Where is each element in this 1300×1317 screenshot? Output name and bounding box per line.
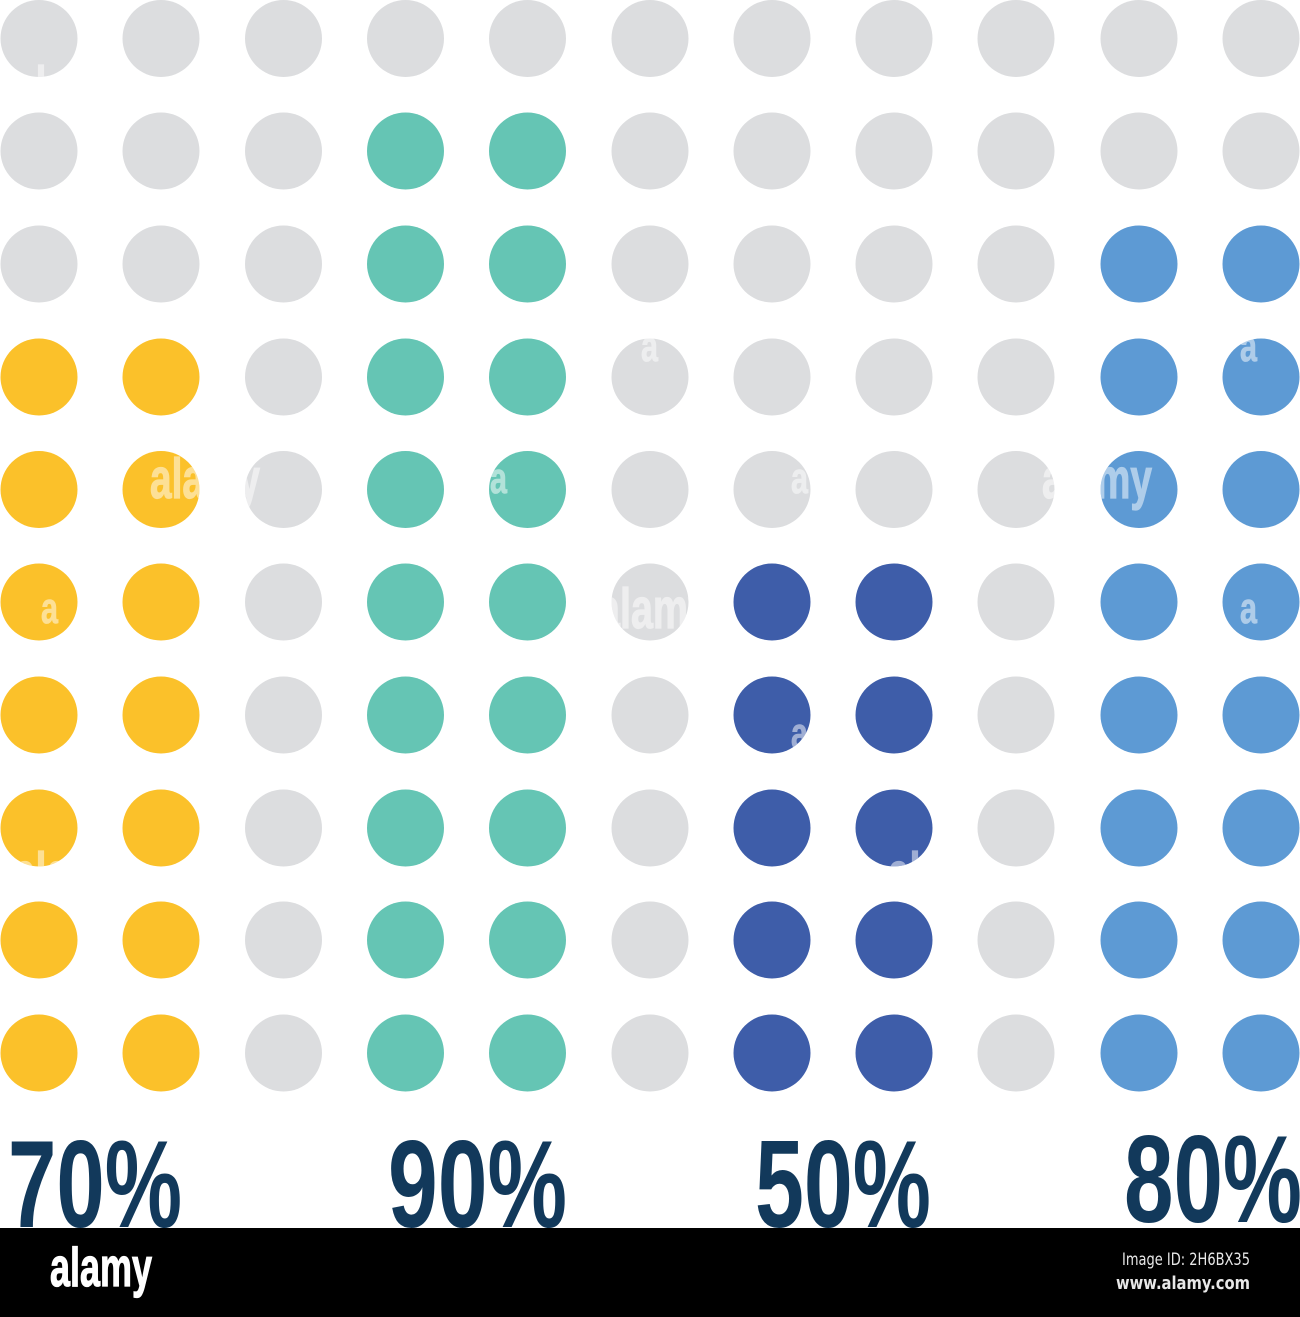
watermark fragments on dots: alamy: [1042, 447, 1152, 511]
label: 50%: 50%: [755, 1116, 931, 1254]
watermark fragments on dots: a: [490, 454, 507, 503]
watermark fragments on dots: a: [791, 454, 808, 503]
spacer column of grey dots, right: [978, 0, 1054, 1092]
watermark fragments on dots: [14, 55, 1257, 905]
watermark fragments on dots: alamy: [888, 841, 998, 905]
watermark fragments on dots: a: [641, 322, 658, 371]
chart: 50% navy dot column: [734, 0, 932, 1092]
footer bar: [0, 1228, 1300, 1317]
watermark fragments on dots: alamy: [14, 55, 124, 119]
watermark fragments on dots: alamy: [150, 447, 260, 511]
spacer column of grey dots: [245, 0, 322, 1092]
spacer column of grey dots, middle: [612, 0, 688, 1092]
chart: 80% blue dot column: [1100, 0, 1300, 1092]
chart: 90% teal dot column: [367, 0, 566, 1092]
watermark fragments on dots: a: [1240, 584, 1257, 633]
watermark fragments on dots: alamy: [1042, 447, 1152, 511]
label: 70%: 70%: [8, 1116, 182, 1254]
watermark fragments on dots: alamy: [14, 841, 124, 905]
watermark fragments on dots: a: [791, 709, 808, 758]
watermark fragments on dots: alamy: [598, 577, 710, 641]
watermark fragments on dots: a: [41, 584, 58, 633]
watermark fragments on dots: alamy: [150, 447, 260, 511]
chart: 70% yellow dot column: [0, 0, 200, 1092]
footer website: www.alamy.com: [1116, 1273, 1250, 1294]
footer logo: alamy: alamy: [50, 1236, 152, 1298]
watermark fragments on dots: a: [1240, 322, 1257, 371]
label: 90%: 90%: [388, 1116, 567, 1254]
footer image id: Image ID: 2H6BX35: [1122, 1250, 1250, 1270]
